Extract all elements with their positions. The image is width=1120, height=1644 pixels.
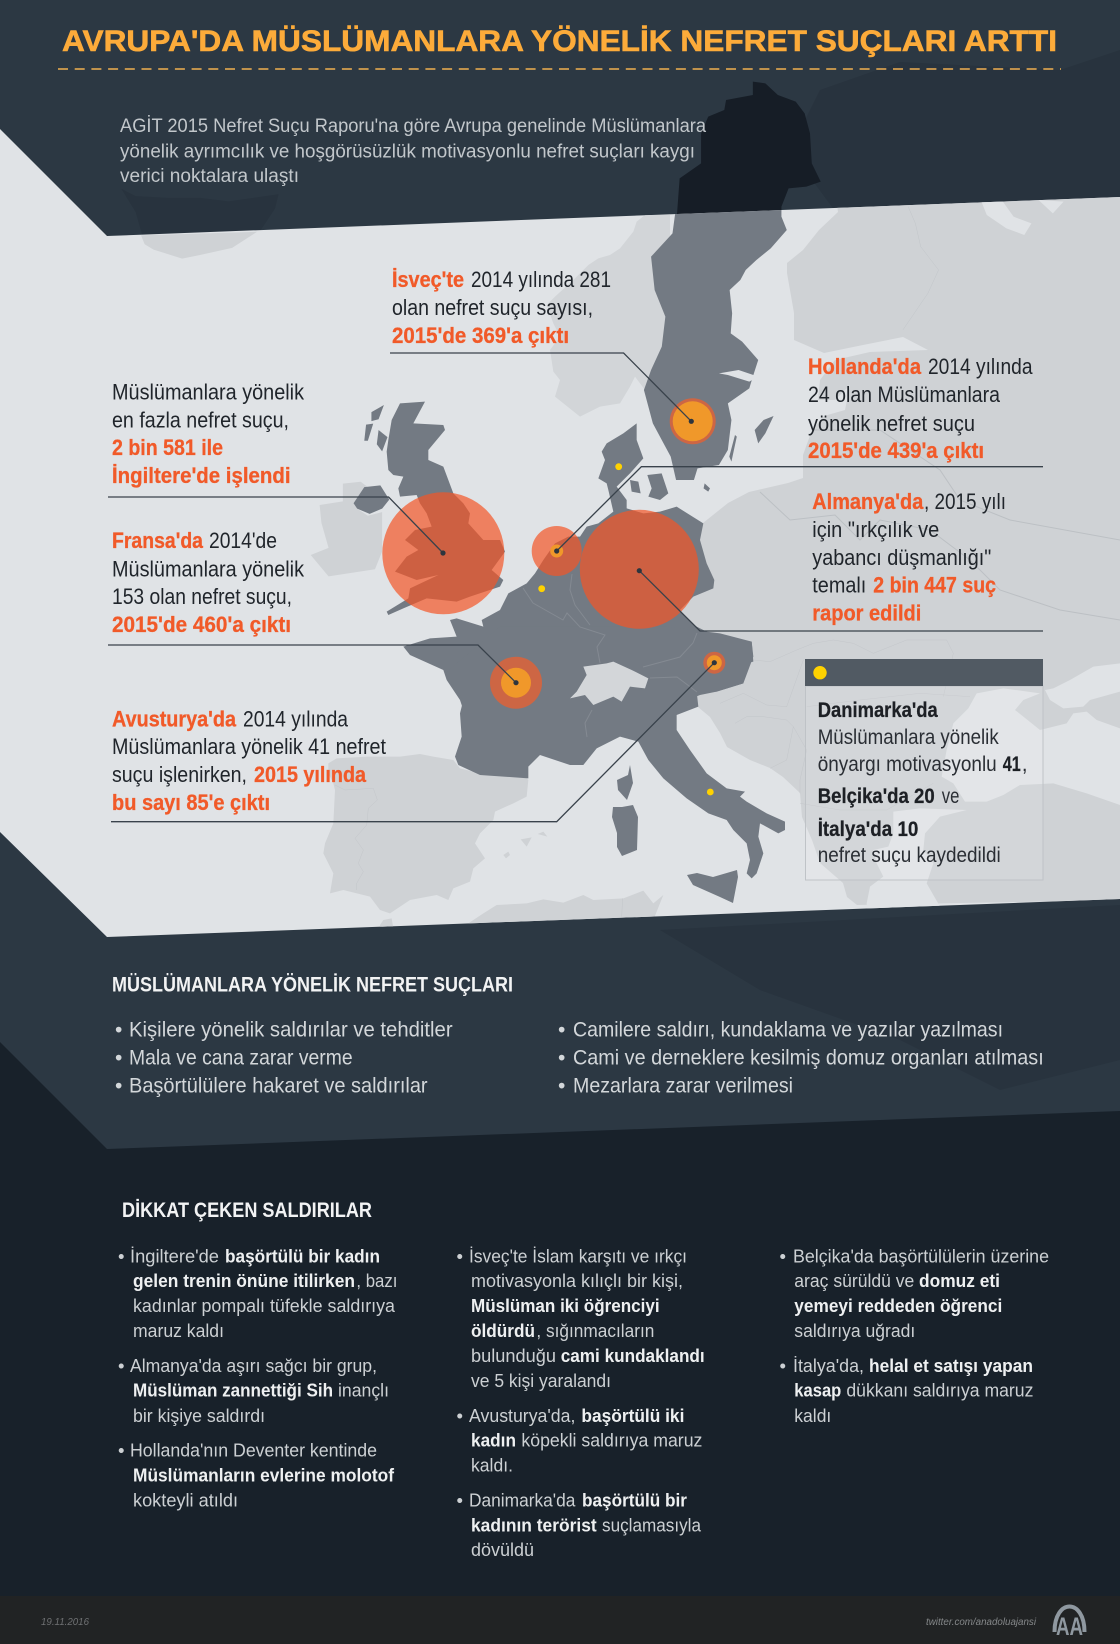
column: attacks 3: •	[780, 1245, 786, 1266]
column: attacks 2: •	[456, 1245, 463, 1266]
map: seas over the eastern land	[867, 663, 1120, 913]
column: attacks 3: kaldı	[794, 1405, 831, 1426]
callout: France: 153 olan nefret suçu,	[112, 584, 292, 609]
legend text: Danimarka'da	[818, 699, 938, 722]
callout: Austria: bu sayı 85'e çıktı	[112, 790, 270, 815]
panel: dark upper band	[0, 0, 1120, 1149]
column: attacks 2: İsveç'te İslam karşıtı ve ırkçı	[469, 1245, 687, 1266]
callout: Austria: suçu işlenirken,	[112, 762, 247, 787]
list: hate crime types left: •	[115, 1046, 122, 1069]
callout: England: Müslümanlara yönelik	[112, 380, 305, 405]
column: attacks 2: ve 5 kişi yaralandı	[471, 1370, 611, 1391]
title divider	[58, 68, 1061, 70]
column: attacks 2: kadın	[471, 1430, 516, 1450]
callout: Netherlands: Hollanda'da	[808, 354, 922, 379]
callout: Netherlands: yönelik nefret suçu	[808, 411, 975, 436]
column: attacks 3: helal et satışı yapan	[869, 1355, 1033, 1376]
column: attacks 2: başörtülü bir	[582, 1490, 687, 1511]
callout: Netherlands	[808, 354, 1033, 463]
legend text	[818, 699, 1028, 867]
footer twitter handle: twitter.com/anadoluajansi	[926, 1617, 1037, 1628]
column: attacks 2: köpekli saldırıya maruz	[521, 1430, 702, 1450]
country: south France and Italy	[445, 627, 785, 878]
column: attacks 2: cami kundaklandı	[561, 1345, 705, 1366]
list: hate crime types right: •	[558, 1075, 565, 1098]
column: attacks 1: Almanya'da aşırı sağcı bir grup,	[130, 1355, 377, 1376]
heading: hate crimes: MÜSLÜMANLARA YÖNELİK NEFRET SUÇLARI	[112, 974, 513, 997]
heading: notable attacks: DİKKAT ÇEKEN SALDIRILAR	[122, 1199, 372, 1222]
land: Iberia	[323, 754, 528, 913]
callout: Netherlands: 2014 yılında	[928, 354, 1033, 379]
marker: Belgium	[538, 585, 545, 592]
callout: Germany	[812, 489, 1006, 626]
column: attacks 3: •	[780, 1355, 786, 1376]
column: attacks 1	[118, 1245, 397, 1511]
callout: England	[112, 380, 305, 488]
column: attacks 2: öldürdü	[471, 1320, 535, 1341]
list: hate crime types right	[558, 1018, 1044, 1098]
callout: Austria: 2014 yılında	[243, 707, 349, 732]
column: attacks 1: gelen trenin önüne itilirken	[133, 1270, 355, 1291]
callout: France: 2015'de 460'a çıktı	[112, 612, 291, 637]
column: attacks 2: kadının terörist	[471, 1514, 597, 1535]
bubble: Germany	[580, 510, 699, 629]
icon: Sweden dark top	[676, 82, 821, 227]
list: hate crime types left: •	[115, 1075, 122, 1098]
callout: Germany: Almanya'da	[812, 489, 924, 514]
column: attacks 1: •	[118, 1439, 124, 1460]
legend text: 41	[1003, 753, 1021, 776]
intro text: AGİT 2015 Nefret Suçu Raporu'na göre Avrupa genelinde Müslümanlara	[120, 116, 706, 137]
list: hate crime types right: Cami ve derneklere kesilmiş domuz organları atılması	[573, 1046, 1044, 1069]
column: attacks 1: inançlı	[338, 1380, 389, 1401]
legend text: Belçika'da 20	[818, 785, 935, 808]
column: attacks 3	[780, 1245, 1049, 1426]
callout: Sweden: İsveç'te	[392, 267, 464, 292]
list: hate crime types left	[115, 1018, 453, 1098]
intro text	[120, 116, 706, 187]
country: Northern Ireland and Hebrides	[354, 405, 389, 514]
column: attacks 2: Danimarka'da	[469, 1490, 576, 1511]
callout: Austria: 2015 yılında	[254, 762, 367, 787]
column: attacks 1: kadınlar pompalı tüfekle saldırıya	[133, 1295, 396, 1316]
column: attacks 3: yemeyi reddeden öğrenci	[794, 1295, 1002, 1316]
column: attacks 3: Belçika'da başörtülülerin üzerine	[793, 1245, 1049, 1266]
legend text: nefret suçu kaydedildi	[818, 844, 1001, 867]
land: Ireland	[311, 482, 382, 576]
callout: Austria	[112, 707, 386, 815]
column: attacks 2	[456, 1245, 705, 1560]
country: Corsica	[617, 765, 633, 800]
leader line end dots	[440, 419, 717, 685]
legend body	[806, 686, 1043, 880]
title: AVRUPA'DA MÜSLÜMANLARA YÖNELİK NEFRET SUÇLARI ARTTI	[62, 25, 1057, 58]
column: attacks 1: •	[118, 1245, 124, 1266]
column: attacks 1: kokteyli atıldı	[133, 1490, 238, 1511]
list: hate crime types left: Kişilere yönelik saldırılar ve tehditler	[129, 1018, 453, 1042]
bubble: Sweden	[670, 398, 716, 444]
map: highlighted countries	[354, 207, 787, 903]
leader lines	[108, 353, 1043, 822]
country: Sweden	[644, 207, 787, 480]
column: attacks 2: dövüldü	[471, 1539, 534, 1560]
callout: Sweden: 2014 yılında 281	[471, 267, 611, 292]
legend yellow dot	[813, 666, 827, 679]
list: hate crime types right: •	[558, 1046, 565, 1069]
callout: Germany: temalı	[812, 573, 866, 598]
column: attacks 2: , sığınmacıların	[536, 1320, 654, 1341]
column: attacks 2: Avusturya'da,	[469, 1405, 575, 1426]
land: eastern Europe and Finland	[670, 190, 1120, 905]
column: attacks 1: bir kişiye saldırdı	[133, 1405, 265, 1426]
intro text: yönelik ayrımcılık ve hoşgörüsüzlük motivasyonlu nefret suçları kaygı	[120, 142, 695, 162]
legend text: ,	[1022, 753, 1028, 776]
land: Norway	[547, 215, 670, 417]
column: attacks 2: •	[456, 1405, 463, 1426]
country: Sicily	[687, 870, 738, 903]
callout: France: 2014'de	[209, 528, 277, 553]
column: attacks 1: başörtülü bir kadın	[225, 1245, 380, 1266]
callout: Sweden	[392, 267, 611, 348]
country: Gotland and Oland	[704, 416, 774, 492]
map: internal borders	[523, 574, 697, 737]
panel: light map panel	[0, 129, 1120, 937]
list: hate crime types left: Başörtülülere hakaret ve saldırılar	[129, 1075, 428, 1098]
country: Denmark, Benelux, Germany, north France, Austria	[403, 423, 753, 730]
panel: yellow marker legend	[805, 659, 1043, 880]
land: North Africa and Balearics	[380, 832, 663, 930]
column: attacks 3: kasap	[794, 1380, 841, 1401]
land: Iceland	[141, 232, 257, 259]
callout: France: Müslümanlara yönelik	[112, 556, 305, 581]
column: attacks 2: başörtülü iki	[581, 1405, 684, 1426]
callout: Sweden: 2015'de 369'a çıktı	[392, 323, 569, 348]
callout: Austria: Avusturya'da	[112, 707, 237, 732]
faint map on dark bands	[121, 50, 1120, 1090]
footer date: 19.11.2016	[41, 1617, 89, 1628]
bubble: Netherlands	[532, 526, 582, 576]
legend text: İtalya'da 10	[818, 818, 918, 841]
list: hate crime types right: Camilere saldırı, kundaklama ve yazılar yazılması	[573, 1018, 1003, 1042]
callout: Netherlands: 24 olan Müslümanlara	[808, 382, 1001, 407]
callout: Germany: yabancı düşmanlığı"	[812, 545, 991, 570]
map: White Sea	[981, 200, 1064, 235]
list: hate crime types right: •	[558, 1018, 565, 1042]
callout: England: 2 bin 581 ile	[112, 435, 223, 460]
callout: Germany: , 2015 yılı	[924, 489, 1006, 514]
callout: Germany: rapor edildi	[812, 601, 921, 626]
column: attacks 3: domuz eti	[919, 1270, 1000, 1291]
legend text: önyargı motivasyonlu	[818, 753, 997, 776]
column: attacks 1: Müslümanların evlerine molotof	[133, 1464, 395, 1486]
bubble: England	[382, 492, 504, 614]
list: hate crime types left: •	[115, 1018, 122, 1042]
column: attacks 1: Hollanda'nın Deventer kentinde	[130, 1439, 377, 1460]
bubble: France	[490, 657, 542, 709]
column: attacks 2: Müslüman iki öğrenciyi	[471, 1295, 660, 1316]
column: attacks 3: dükkanı saldırıya maruz	[846, 1380, 1033, 1401]
country: Sardinia	[612, 805, 638, 856]
callout: England: en fazla nefret suçu,	[112, 408, 289, 432]
legend text: ve	[942, 785, 959, 808]
column: attacks 1: Müslüman zannettiği Sih	[133, 1380, 333, 1401]
icon: Anadolu Agency logo: AA	[1056, 1613, 1083, 1641]
column: attacks 3: İtalya'da,	[793, 1355, 864, 1376]
marker: Italy	[707, 789, 714, 795]
icon: Anadolu Agency logo	[1054, 1606, 1084, 1641]
legend header	[805, 659, 1043, 686]
legend text: Müslümanlara yönelik	[818, 726, 999, 749]
bubble: Austria	[703, 652, 725, 674]
callout: France	[112, 528, 305, 637]
callout: France: Fransa'da	[112, 528, 204, 553]
list: hate crime types left: Mala ve cana zarar verme	[129, 1046, 353, 1069]
callout: Austria: Müslümanlara yönelik 41 nefret	[112, 734, 386, 759]
column: attacks 2: bulunduğu	[471, 1345, 556, 1366]
list: hate crime types right: Mezarlara zarar verilmesi	[573, 1075, 793, 1098]
map: non-highlighted countries	[141, 190, 1120, 930]
callout: Sweden: olan nefret suçu sayısı,	[392, 295, 593, 320]
map: Lake Vanern	[719, 370, 758, 382]
column: attacks 2: motivasyonla kılıçlı bir kişi,	[471, 1270, 683, 1291]
column: attacks 1: , bazı	[356, 1270, 397, 1291]
column: attacks 2: kaldı.	[471, 1455, 513, 1476]
column: attacks 3: saldırıya uğradı	[794, 1320, 915, 1341]
country: United Kingdom	[387, 402, 505, 615]
intro text: verici noktalara ulaştı	[120, 166, 299, 187]
column: attacks 2: •	[456, 1490, 463, 1511]
callout: Germany: 2 bin 447 suç	[873, 573, 996, 598]
callout: Netherlands: 2015'de 439'a çıktı	[808, 438, 984, 463]
country: Denmark islands	[630, 473, 668, 500]
callout: Germany: için "ırkçılık ve	[812, 517, 939, 542]
column: attacks 1: maruz kaldı	[133, 1320, 224, 1341]
column: attacks 2: suçlamasıyla	[602, 1514, 702, 1535]
column: attacks 1: İngiltere'de	[130, 1245, 219, 1266]
map: Switzerland	[570, 662, 648, 705]
footer bar	[0, 1596, 1120, 1644]
map of Europe	[141, 190, 1120, 930]
marker: Denmark	[615, 463, 622, 470]
column: attacks 1: •	[118, 1355, 124, 1376]
map: country borders	[335, 207, 1120, 917]
callout: England: İngiltere'de işlendi	[112, 463, 290, 488]
column: attacks 3: araç sürüldü ve	[794, 1270, 914, 1291]
